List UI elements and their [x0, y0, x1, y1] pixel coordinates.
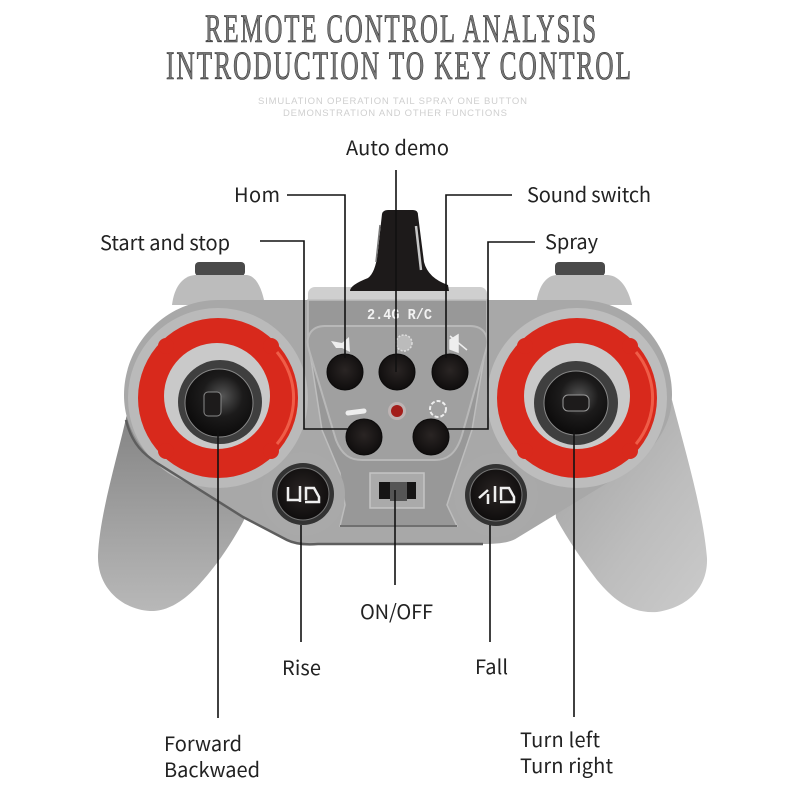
center top plate [308, 287, 487, 327]
fall button [465, 464, 527, 526]
labels: Rise [282, 652, 321, 681]
antenna [350, 210, 449, 291]
right grip [550, 400, 707, 612]
rise button [272, 463, 334, 525]
left grip [98, 400, 250, 611]
demo icon [396, 335, 412, 351]
labels: Turn right [520, 750, 613, 779]
mute icon [450, 335, 467, 352]
horn icon [331, 337, 350, 352]
labels: Auto demo [346, 132, 449, 161]
labels: Spray [545, 226, 599, 255]
title [166, 6, 633, 88]
left joystick assembly [128, 308, 308, 488]
power switch [370, 473, 424, 508]
right joystick assembly [487, 308, 667, 488]
start icon [348, 411, 364, 413]
lower edge line [340, 525, 457, 527]
controller [98, 210, 707, 612]
left shoulder [172, 275, 265, 305]
button panel [308, 326, 487, 460]
function buttons [327, 354, 468, 455]
body outline [126, 420, 483, 544]
labels: Forward [164, 728, 242, 757]
subtitle: DEMONSTRATION AND OTHER FUNCTIONS [283, 108, 507, 119]
labels: Hom [234, 179, 280, 208]
rise button surround [261, 452, 345, 536]
leader lines [218, 170, 574, 718]
center face [308, 300, 487, 526]
right shoulder [536, 275, 632, 305]
led [388, 402, 406, 420]
labels: ON/OFF [360, 596, 433, 625]
labels: Fall [475, 651, 508, 680]
labels [100, 132, 651, 783]
rc label: 2.4G R/C [367, 307, 432, 324]
left bumper [195, 262, 245, 276]
main body [124, 300, 672, 544]
fall button surround [454, 453, 538, 537]
labels: Turn left [520, 724, 600, 753]
labels: Backwaed [164, 754, 260, 783]
labels: Sound switch [527, 179, 651, 208]
subtitle: SIMULATION OPERATION TAIL SPRAY ONE BUTTON [258, 96, 527, 107]
right bumper [555, 262, 605, 276]
spray icon [430, 401, 446, 417]
labels: Start and stop [100, 227, 230, 256]
subtitle [258, 96, 527, 119]
